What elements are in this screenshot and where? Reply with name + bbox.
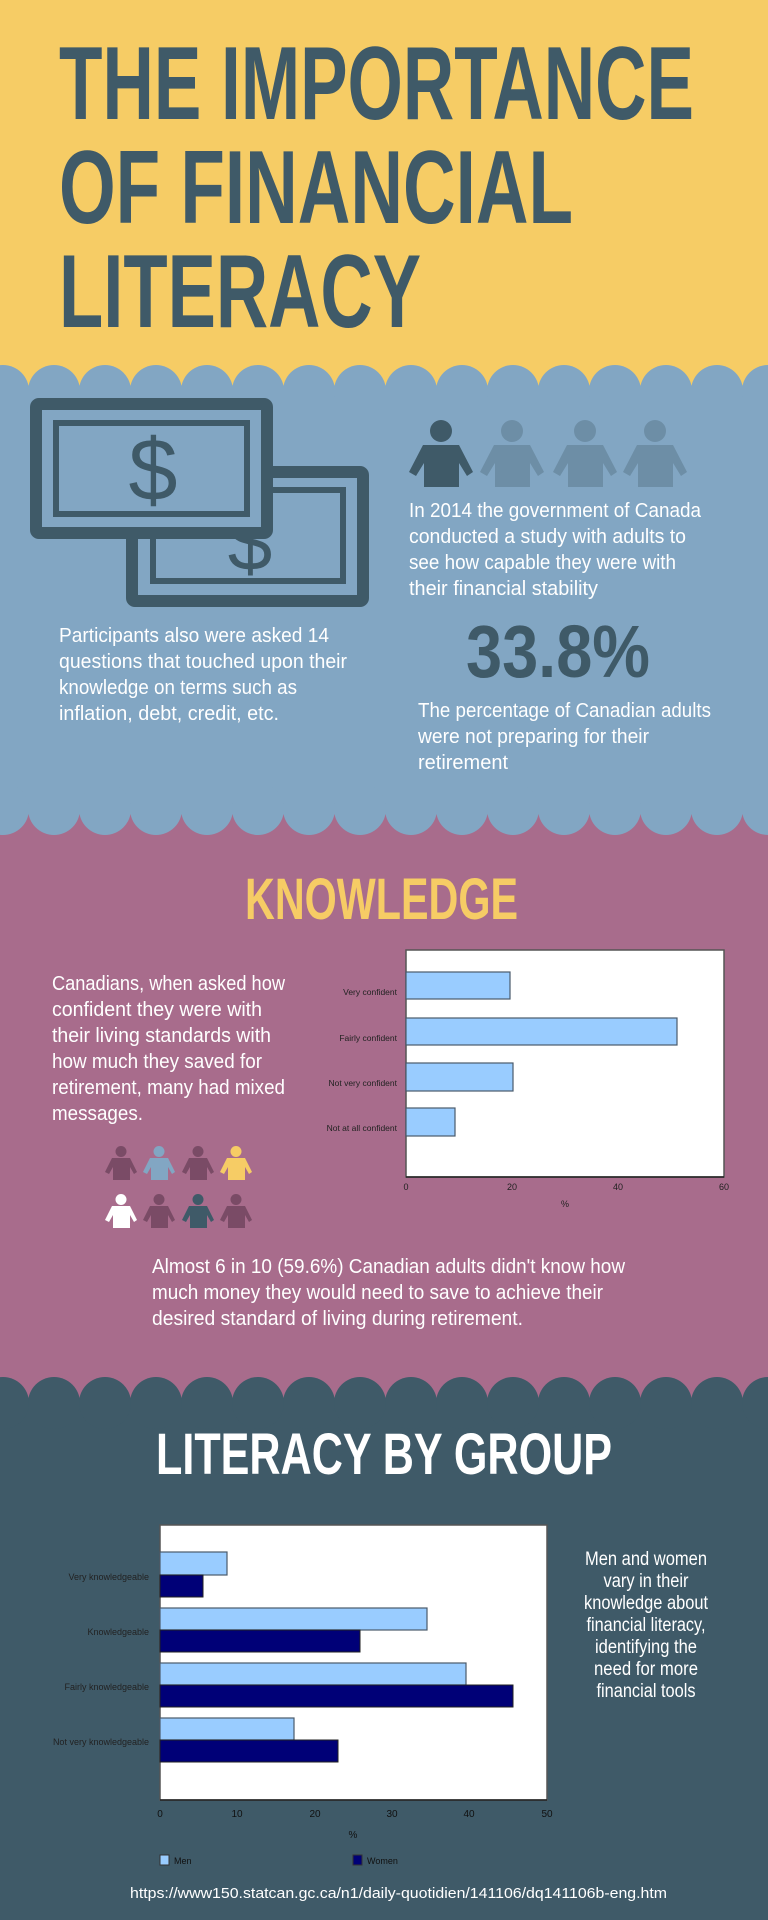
heading: literacy by group: LITERACY BY GROUP bbox=[156, 1422, 612, 1487]
chart: literacy by gender: 0 bbox=[157, 1809, 163, 1820]
chart: confidence: Not very confident bbox=[328, 1078, 398, 1088]
text: confidence: confident they were with bbox=[52, 999, 262, 1021]
chart: literacy by gender: Not very knowledgeable bbox=[53, 1737, 149, 1747]
chart: confidence: Not at all confident bbox=[327, 1123, 398, 1133]
legend: Men bbox=[174, 1856, 192, 1866]
text: participants: knowledge on terms such as bbox=[59, 677, 297, 699]
icon: people grid bbox=[105, 1146, 252, 1228]
text: study intro: their financial stability bbox=[409, 578, 598, 600]
text: confidence: Canadians, when asked how bbox=[52, 973, 285, 995]
text: participants: Participants also were asked 14 bbox=[59, 625, 329, 647]
icon: dollar bills: $ bbox=[129, 420, 177, 519]
chart: confidence: 40 bbox=[613, 1182, 623, 1192]
chart: literacy by gender: 20 bbox=[309, 1809, 321, 1820]
chart: literacy by gender: Knowledgeable bbox=[87, 1627, 149, 1637]
chart: confidence: % bbox=[561, 1199, 569, 1209]
text: confidence: retirement, many had mixed bbox=[52, 1077, 285, 1099]
title bbox=[59, 26, 694, 350]
icon: people row bbox=[409, 420, 687, 487]
heading: knowledge: KNOWLEDGE bbox=[245, 867, 518, 932]
chart: literacy by gender: Fairly knowledgeable bbox=[64, 1682, 149, 1692]
text: 59.6% statement: desired standard of living during retirement. bbox=[152, 1308, 523, 1330]
text: confidence bbox=[52, 973, 285, 1125]
chart: confidence: 20 bbox=[507, 1182, 517, 1192]
chart: literacy by gender: Very knowledgeable bbox=[68, 1572, 149, 1582]
text: study intro: see how capable they were with bbox=[409, 552, 676, 574]
title: LITERACY bbox=[59, 234, 421, 350]
stat: 33.8%: 33.8% bbox=[466, 610, 650, 693]
text: men and women: identifying the bbox=[595, 1637, 697, 1658]
chart: confidence: Fairly confident bbox=[339, 1033, 398, 1043]
text: participants bbox=[59, 625, 347, 725]
chart: confidence: 0 bbox=[403, 1182, 409, 1192]
chart: literacy by gender: % bbox=[349, 1830, 358, 1841]
text: study intro: conducted a study with adults to bbox=[409, 526, 686, 548]
icon: dollar bills: $ bbox=[228, 498, 272, 587]
text: men and women: Men and women bbox=[585, 1549, 707, 1570]
text: men and women: financial tools bbox=[596, 1681, 696, 1702]
chart: literacy by gender: 10 bbox=[231, 1809, 243, 1820]
text: men and women: financial literacy, bbox=[586, 1615, 706, 1636]
text: study intro: In 2014 the government of Canada bbox=[409, 500, 702, 522]
icon: dollar bills bbox=[36, 404, 363, 601]
chart: literacy by gender bbox=[53, 1525, 553, 1866]
text: 59.6% statement: much money they would need to save to achieve their bbox=[152, 1282, 603, 1304]
scallops bbox=[0, 365, 768, 1429]
chart: confidence bbox=[327, 950, 729, 1209]
text: men and women: knowledge about bbox=[584, 1593, 709, 1614]
text: percentage caption: were not preparing for their bbox=[417, 726, 649, 748]
text: men and women bbox=[584, 1549, 709, 1702]
legend: Women bbox=[367, 1856, 398, 1866]
chart: literacy by gender: 50 bbox=[541, 1809, 553, 1820]
source url: https://www150.statcan.gc.ca/n1/daily-quotidien/141106/dq141106b-eng.htm bbox=[130, 1885, 667, 1902]
chart: confidence: 60 bbox=[719, 1182, 729, 1192]
text: confidence: their living standards with bbox=[52, 1025, 271, 1047]
text: confidence: messages. bbox=[52, 1103, 143, 1125]
text: 59.6% statement bbox=[152, 1256, 626, 1330]
text: participants: questions that touched upon their bbox=[59, 651, 347, 673]
text: percentage caption: retirement bbox=[418, 752, 508, 774]
text: 59.6% statement: Almost 6 in 10 (59.6%) Canadian adults didn't know how bbox=[152, 1256, 626, 1278]
text: percentage caption bbox=[417, 700, 711, 774]
chart: literacy by gender: 30 bbox=[386, 1809, 398, 1820]
text: study intro bbox=[409, 500, 702, 600]
text: men and women: need for more bbox=[594, 1659, 698, 1680]
text: percentage caption: The percentage of Canadian adults bbox=[418, 700, 711, 722]
text: men and women: vary in their bbox=[604, 1571, 689, 1592]
chart: literacy by gender: 40 bbox=[463, 1809, 475, 1820]
text: confidence: how much they saved for bbox=[52, 1051, 262, 1073]
chart: confidence: Very confident bbox=[343, 987, 398, 997]
text: participants: inflation, debt, credit, etc. bbox=[59, 703, 279, 725]
legend bbox=[160, 1855, 398, 1866]
